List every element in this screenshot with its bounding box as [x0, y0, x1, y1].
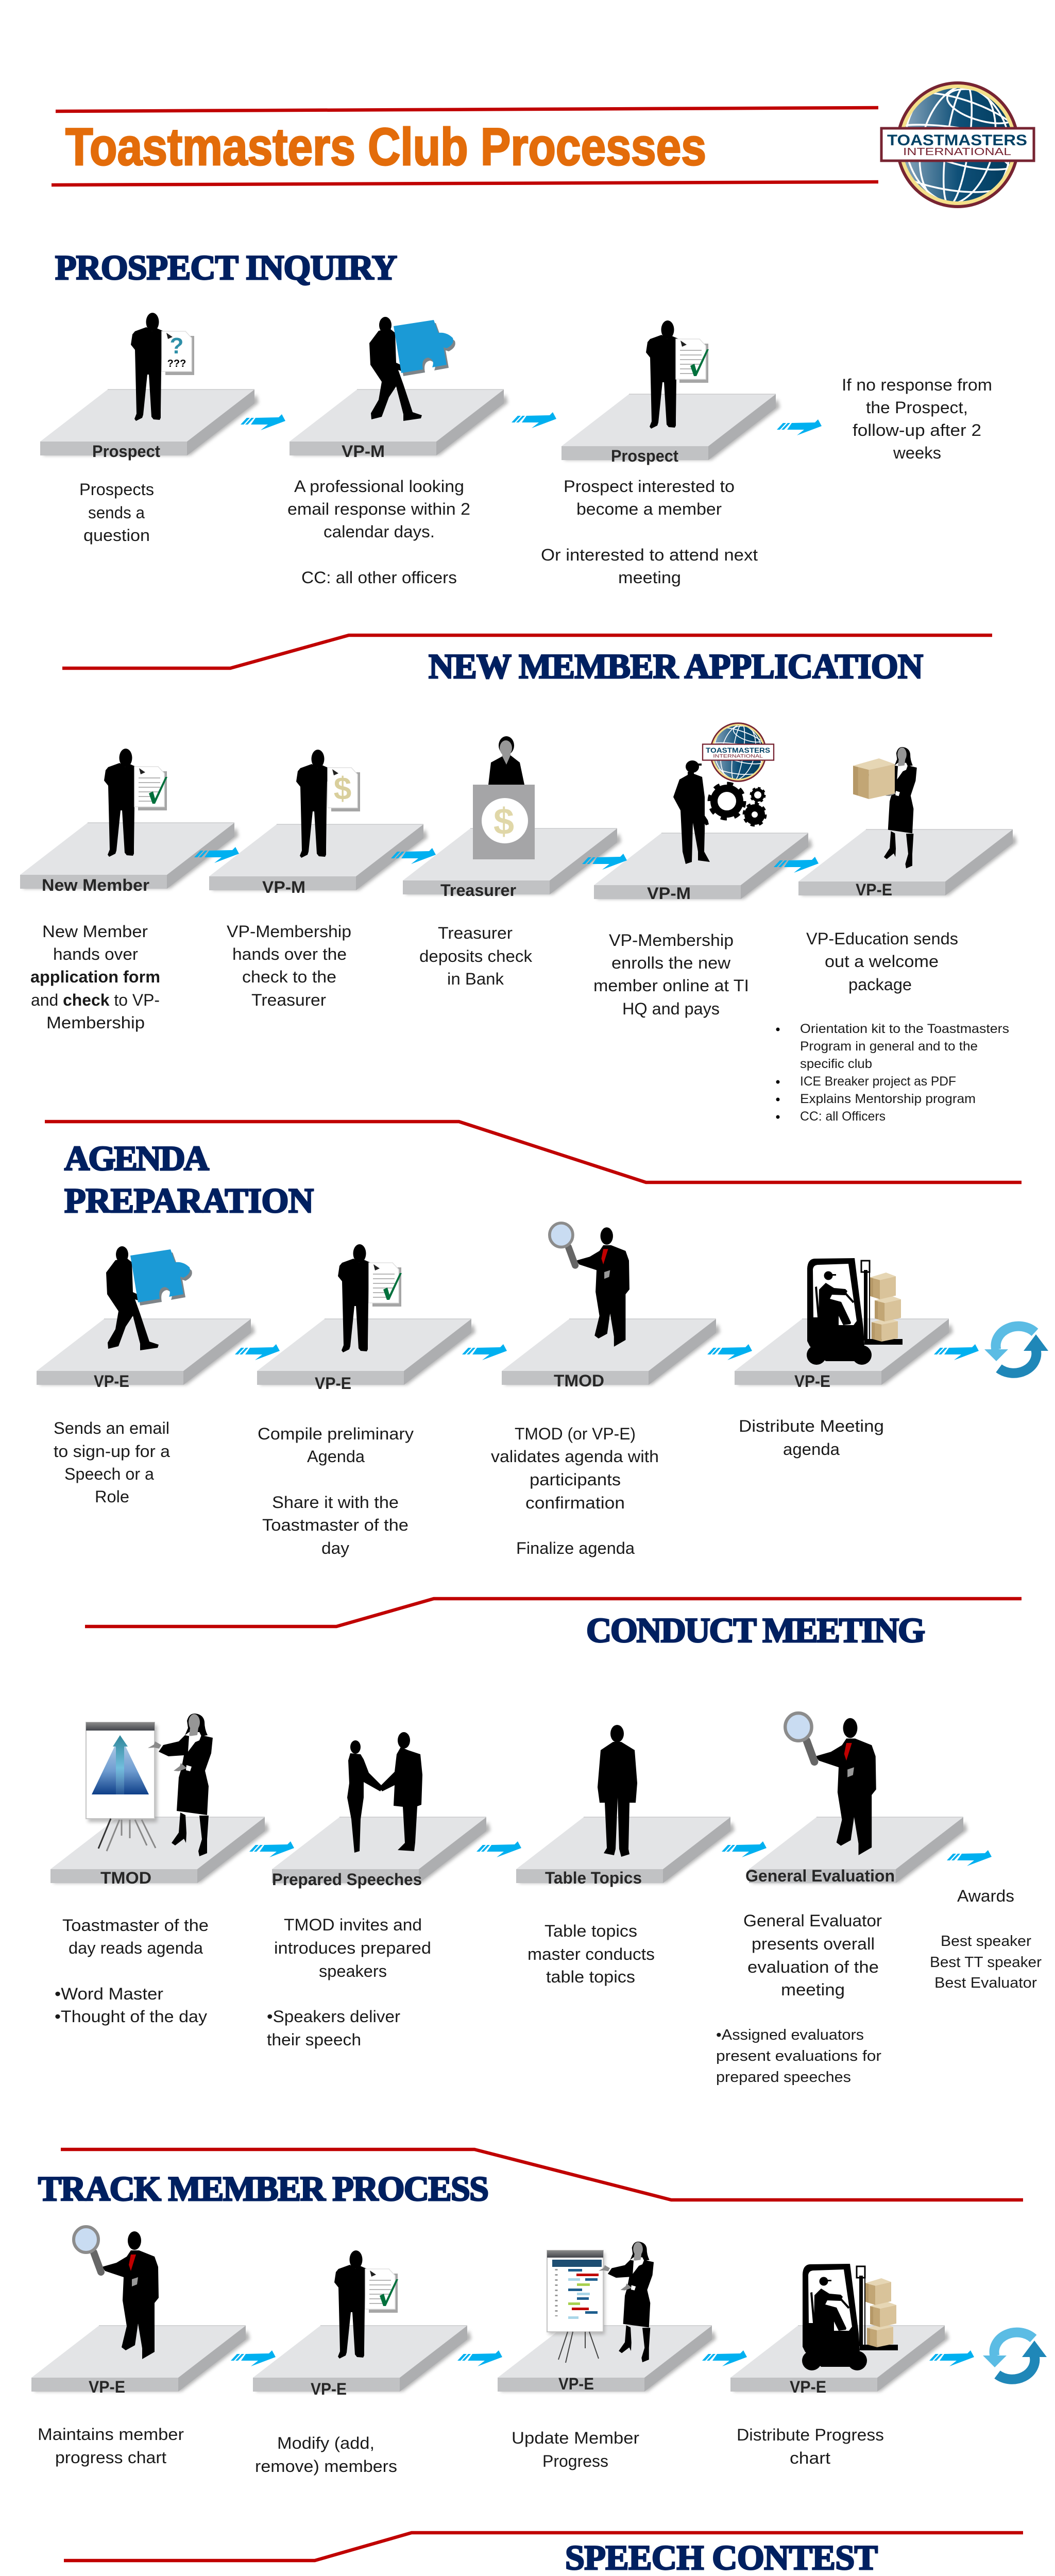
description: Distribute Progress	[737, 2426, 884, 2444]
panel: conduct meeting	[50, 1611, 1042, 2086]
icon: man with magnifier	[550, 1223, 629, 1347]
heading: conduct meeting: CONDUCT MEETING	[586, 1611, 925, 1650]
heading: track member process: TRACK MEMBER PROCESS	[38, 2169, 489, 2208]
description: Prospects	[79, 480, 154, 499]
description: VP-Education sends	[806, 929, 958, 948]
description: General Evaluator	[743, 1911, 882, 1930]
description: •Word Master	[55, 1985, 163, 2003]
icon: man with checklist	[646, 320, 709, 429]
label: VP-E	[94, 1372, 129, 1391]
description: validates agenda with	[491, 1447, 659, 1466]
description: Update Member	[512, 2429, 639, 2447]
description	[739, 1417, 884, 1459]
icon: worker with gears and logo	[673, 719, 776, 864]
label: TMOD	[554, 1371, 604, 1390]
label: VP-E	[790, 2378, 826, 2396]
description: day	[321, 1539, 349, 1557]
icon: man with question document	[131, 313, 194, 421]
label: VP-E	[89, 2378, 125, 2396]
label: Table Topics	[545, 1869, 642, 1887]
description	[419, 924, 533, 988]
icon: standing man	[598, 1725, 637, 1857]
icon: woman with box	[853, 747, 917, 868]
description: •Speakers deliver	[267, 2007, 400, 2026]
icon: forklift	[807, 1258, 903, 1365]
label: VP-M	[262, 878, 305, 896]
follow-up note: the Prospect,	[866, 398, 968, 417]
icon: man with check: $	[334, 771, 351, 807]
description: hands over	[53, 945, 138, 963]
description: participants	[530, 1470, 621, 1489]
description: New Member	[42, 922, 148, 941]
description: agenda	[783, 1440, 840, 1459]
description	[541, 477, 758, 587]
description: sends a	[88, 503, 145, 522]
icon: man with magnifier	[74, 2227, 159, 2359]
description	[593, 931, 749, 1018]
title: Toastmasters Club Processes	[65, 117, 706, 176]
description: Table topics	[544, 1922, 637, 1940]
description: Toastmaster of the	[262, 1516, 409, 1534]
step: Prospect interested	[541, 320, 780, 587]
description: out a welcome	[825, 952, 939, 971]
description	[258, 1425, 414, 1557]
description: Speech or a	[64, 1465, 154, 1483]
description: package	[848, 975, 912, 994]
step: General Evaluation	[716, 1713, 967, 2086]
description: Compile preliminary	[258, 1425, 414, 1443]
label: Prospect	[611, 447, 678, 465]
bullet list: welcome package contents: Explains Mentorship program	[800, 1092, 976, 1106]
arrows	[241, 412, 822, 435]
awards note	[930, 1887, 1042, 1991]
bullet list: welcome package contents	[776, 1022, 1009, 1124]
description: deposits check	[419, 947, 533, 965]
step: TMOD	[50, 1714, 269, 2026]
description	[227, 922, 351, 1009]
awards note: Best TT speaker	[930, 1954, 1042, 1971]
note: assigned evaluators: present evaluations for	[716, 2048, 881, 2064]
icon: Toastmasters International logo: INTERNATIONAL	[903, 146, 1011, 158]
description: become a member	[576, 500, 722, 518]
icon: man with question document: ?	[170, 333, 183, 359]
heading: agenda preparation	[64, 1139, 314, 1220]
icon: man with magnifier	[785, 1713, 876, 1855]
description: hands over the	[232, 945, 347, 963]
label: VP-E	[558, 2375, 594, 2393]
label: TMOD	[100, 1869, 151, 1887]
description	[54, 1419, 170, 1506]
heading: prospect inquiry: PROSPECT INQUIRY	[55, 248, 397, 287]
description: meeting	[618, 568, 681, 587]
label: Prospect	[92, 442, 160, 461]
bullet list: welcome package contents: Program in general and to the	[800, 1039, 978, 1054]
icon: Toastmasters International logo	[867, 73, 1040, 216]
step: TMOD	[491, 1223, 720, 1557]
icon: man carrying puzzle piece	[369, 317, 455, 421]
description: Progress	[542, 2452, 608, 2470]
step: VP-E compile	[257, 1244, 475, 1557]
description: Role	[95, 1487, 129, 1506]
icon: treasurer at podium	[473, 736, 535, 859]
description: check to the	[242, 968, 336, 986]
step: Prepared Speeches	[267, 1732, 490, 2049]
description: member online at TI	[593, 976, 749, 995]
description: Modify (add,	[277, 2434, 375, 2452]
description: •Thought of the day	[55, 2007, 207, 2026]
icon: man with check	[296, 750, 360, 858]
description: to sign-up for a	[54, 1442, 170, 1461]
awards note: Best speaker	[941, 1933, 1031, 1950]
label: VP-E	[794, 1372, 830, 1391]
step: modify members	[253, 2250, 471, 2476]
label: VP-M	[342, 442, 385, 461]
bullet list: welcome package contents: ICE Breaker project as PDF	[800, 1074, 956, 1089]
description: Finalize agenda	[516, 1539, 635, 1557]
description	[30, 922, 160, 1032]
label: Treasurer	[440, 881, 516, 900]
heading: agenda preparation: PREPARATION	[64, 1181, 314, 1220]
description: master conducts	[528, 1945, 655, 1963]
description: speakers	[319, 1962, 387, 1980]
step: VP-E sign-up	[37, 1246, 255, 1506]
follow-up note	[842, 376, 992, 462]
description: Prospect interested to	[564, 477, 735, 496]
icon: man with question document: ???	[167, 358, 186, 369]
description: remove) members	[255, 2457, 397, 2476]
bullet list: welcome package contents: CC: all Officers	[800, 1109, 886, 1124]
step: VP-M	[287, 317, 508, 587]
description: day reads agenda	[69, 1939, 203, 1957]
description: chart	[790, 2449, 830, 2467]
description: Or interested to attend next	[541, 546, 758, 564]
label: General Evaluation	[745, 1867, 895, 1885]
description: VP-Membership	[609, 931, 734, 950]
description	[255, 2434, 397, 2476]
icon: repeat cycle	[983, 2332, 1047, 2379]
step: VP-E welcome package	[776, 747, 1017, 1124]
description	[528, 1922, 655, 1986]
icon: treasurer at podium: $	[494, 801, 514, 842]
description: TMOD invites and	[284, 1916, 422, 1934]
description: Distribute Meeting	[739, 1417, 884, 1435]
follow-up note: If no response from	[842, 376, 992, 394]
description	[743, 1911, 882, 1999]
description: their speech	[267, 2030, 361, 2049]
bullet list: welcome package contents: specific club	[800, 1057, 872, 1071]
description: TMOD (or VP-E)	[515, 1425, 636, 1443]
description: Maintains member	[38, 2425, 184, 2444]
description: evaluation of the	[747, 1958, 879, 1976]
arrows	[249, 1841, 992, 1866]
description	[287, 477, 470, 587]
step: VP-M enrolls	[593, 719, 812, 1018]
step: Table Topics	[516, 1725, 735, 1986]
step: update progress	[498, 2242, 716, 2470]
icon: worker with gears and logo: INTERNATIONAL	[713, 753, 763, 758]
label: VP-E	[315, 1374, 351, 1393]
arrows	[235, 1344, 979, 1360]
icon: man carrying puzzle piece	[106, 1246, 192, 1350]
panel: track member process	[31, 2169, 1047, 2476]
step: VP-M hands check	[209, 750, 428, 1009]
label: VP-E	[311, 2380, 347, 2398]
description: progress chart	[55, 2448, 166, 2467]
description	[806, 929, 958, 994]
description: table topics	[546, 1968, 635, 1986]
arrows	[231, 2350, 974, 2366]
icon: man with checklist	[334, 2250, 398, 2359]
description: Agenda	[307, 1447, 365, 1466]
description: email response within 2	[287, 500, 470, 518]
description: presents overall	[752, 1935, 875, 1953]
icon: worker with gears and logo: TOASTMASTERS	[706, 746, 770, 754]
panel: prospect inquiry	[40, 248, 992, 587]
panel: agenda preparation	[37, 1139, 1048, 1557]
icon: man with application form	[104, 749, 167, 857]
icon: woman presenting flipchart	[86, 1714, 213, 1856]
description: Treasurer	[438, 924, 513, 942]
description: CC: all other officers	[301, 568, 457, 587]
step: Treasurer	[403, 736, 621, 988]
description: Sends an email	[54, 1419, 169, 1437]
description: in Bank	[447, 970, 504, 988]
description: meeting	[781, 1980, 845, 1999]
description: calendar days.	[324, 522, 435, 541]
icon: handshake	[347, 1732, 422, 1853]
description: Share it with the	[272, 1493, 399, 1512]
description	[55, 1916, 209, 2026]
description	[737, 2426, 884, 2467]
description: introduces prepared	[274, 1939, 431, 1957]
label: VP-E	[856, 880, 892, 899]
follow-up note: follow-up after 2	[853, 421, 981, 439]
note: assigned evaluators: •Assigned evaluators	[716, 2027, 864, 2043]
description: VP-Membership	[227, 922, 351, 941]
description: Toastmaster of the	[62, 1916, 209, 1935]
icon: Toastmasters International logo: TOASTMASTERS	[887, 132, 1027, 149]
description	[267, 1916, 431, 2049]
step: maintain chart	[31, 2227, 250, 2467]
description: and check to VP-	[31, 991, 160, 1009]
description	[491, 1425, 659, 1557]
step: VP-E distribute	[735, 1258, 953, 1459]
icon: man with checklist	[338, 1244, 402, 1352]
icon: forklift	[802, 2264, 898, 2370]
step: Prospect	[40, 313, 259, 545]
follow-up note: weeks	[893, 444, 941, 462]
label: Prepared Speeches	[272, 1870, 422, 1889]
awards note: Best Evaluator	[934, 1975, 1037, 1991]
heading: speech contest preparation: SPEECH CONTEST	[565, 2538, 878, 2576]
icon: woman presenting gantt chart	[547, 2242, 654, 2363]
note: assigned evaluators	[716, 2027, 881, 2086]
description: application form	[30, 968, 160, 986]
description: enrolls the new	[611, 954, 731, 972]
description	[38, 2425, 184, 2467]
label: VP-M	[647, 884, 691, 903]
icon: repeat cycle	[984, 1326, 1048, 1373]
heading: agenda preparation: AGENDA	[64, 1139, 209, 1178]
step: New Member	[20, 749, 239, 1032]
description: question	[83, 526, 150, 545]
description	[79, 480, 154, 545]
description: A professional looking	[294, 477, 464, 496]
note: assigned evaluators: prepared speeches	[716, 2069, 851, 2086]
description	[512, 2429, 639, 2470]
description: confirmation	[525, 1494, 625, 1512]
description: Treasurer	[251, 991, 326, 1009]
description: HQ and pays	[622, 999, 720, 1018]
label: New Member	[42, 876, 149, 894]
arrows	[194, 847, 819, 873]
bullet list: welcome package contents: Orientation kit to the Toastmasters	[800, 1022, 1009, 1036]
description: Membership	[46, 1013, 145, 1032]
awards note: Awards	[957, 1887, 1014, 1905]
panel: new member application	[20, 647, 1017, 1124]
step: distribute chart	[730, 2264, 949, 2467]
heading: new member application: NEW MEMBER APPLICATION	[429, 647, 923, 686]
